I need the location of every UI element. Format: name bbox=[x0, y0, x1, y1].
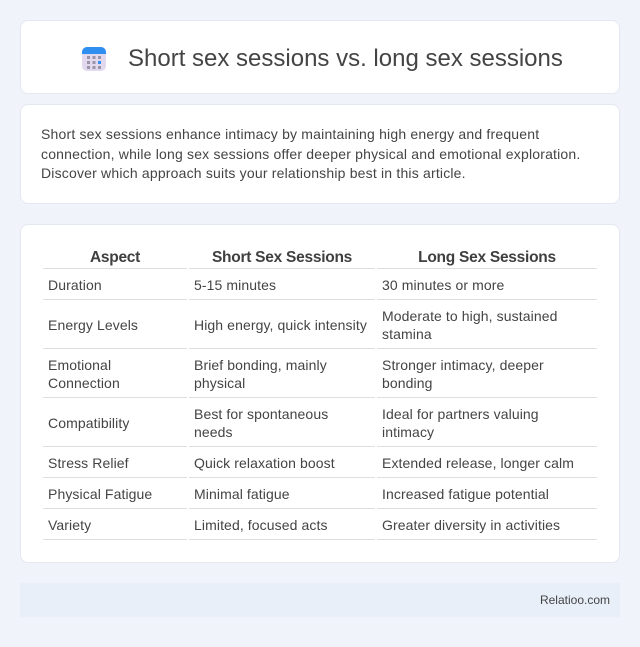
icon: calendar bbox=[82, 47, 106, 71]
row: Physical Fatigue: Minimal fatigue bbox=[194, 486, 290, 502]
panel: comparison table bbox=[20, 224, 620, 563]
footer bar bbox=[20, 583, 620, 617]
row: Compatibility: Best for spontaneous bbox=[194, 406, 328, 422]
row: Variety: Limited, focused acts bbox=[194, 517, 328, 533]
row: Duration: Duration bbox=[48, 277, 102, 293]
panel: title card bbox=[20, 20, 620, 94]
table header: Long Sex Sessions bbox=[418, 249, 556, 266]
row: Emotional Connection: Stronger intimacy, deeper bbox=[382, 357, 544, 373]
row: Variety: Greater diversity in activities bbox=[382, 517, 560, 533]
footer text: Relatioo.com bbox=[540, 593, 610, 607]
row: Compatibility bbox=[43, 406, 597, 447]
row: Emotional Connection: physical bbox=[194, 375, 245, 391]
intro text: Short sex sessions enhance intimacy by maintaining high energy and frequent bbox=[41, 126, 539, 142]
row: Energy Levels: Energy Levels bbox=[48, 317, 138, 333]
row: Energy Levels bbox=[43, 308, 597, 349]
row: Stress Relief: Extended release, longer calm bbox=[382, 455, 574, 471]
row: Duration: 5-15 minutes bbox=[194, 277, 276, 293]
table header bbox=[43, 249, 597, 269]
row: Physical Fatigue: Physical Fatigue bbox=[48, 486, 152, 502]
title: Short sex sessions vs. long sex sessions bbox=[128, 45, 563, 72]
row: Stress Relief bbox=[43, 455, 597, 478]
intro text: Discover which approach suits your relationship best in this article. bbox=[41, 165, 466, 181]
row: Compatibility: intimacy bbox=[382, 424, 434, 440]
row: Energy Levels: Moderate to high, sustained bbox=[382, 308, 557, 324]
row: Physical Fatigue bbox=[43, 486, 597, 509]
intro text: connection, while long sex sessions offer deeper physical and emotional exploration. bbox=[41, 146, 580, 162]
row: Duration: 30 minutes or more bbox=[382, 277, 504, 293]
row: Emotional Connection: Emotional bbox=[48, 357, 111, 373]
row: Emotional Connection: Connection bbox=[48, 375, 120, 391]
row: Compatibility: Compatibility bbox=[48, 415, 129, 431]
row: Physical Fatigue: Increased fatigue potential bbox=[382, 486, 549, 502]
row: Compatibility: Ideal for partners valuing bbox=[382, 406, 539, 422]
intro text bbox=[41, 126, 580, 181]
table header: Short Sex Sessions bbox=[212, 249, 352, 266]
panel: introduction bbox=[20, 104, 620, 204]
row: Variety: Variety bbox=[48, 517, 91, 533]
table header: Aspect bbox=[90, 249, 140, 266]
row: Variety bbox=[43, 517, 597, 540]
row: Emotional Connection: bonding bbox=[382, 375, 433, 391]
row: Stress Relief: Stress Relief bbox=[48, 455, 129, 471]
row: Emotional Connection: Brief bonding, mainly bbox=[194, 357, 327, 373]
row: Stress Relief: Quick relaxation boost bbox=[194, 455, 335, 471]
row: Compatibility: needs bbox=[194, 424, 233, 440]
row: Emotional Connection bbox=[43, 357, 597, 398]
row: Duration bbox=[43, 277, 597, 300]
row: Energy Levels: High energy, quick intensity bbox=[194, 317, 367, 333]
row: Energy Levels: stamina bbox=[382, 326, 432, 342]
